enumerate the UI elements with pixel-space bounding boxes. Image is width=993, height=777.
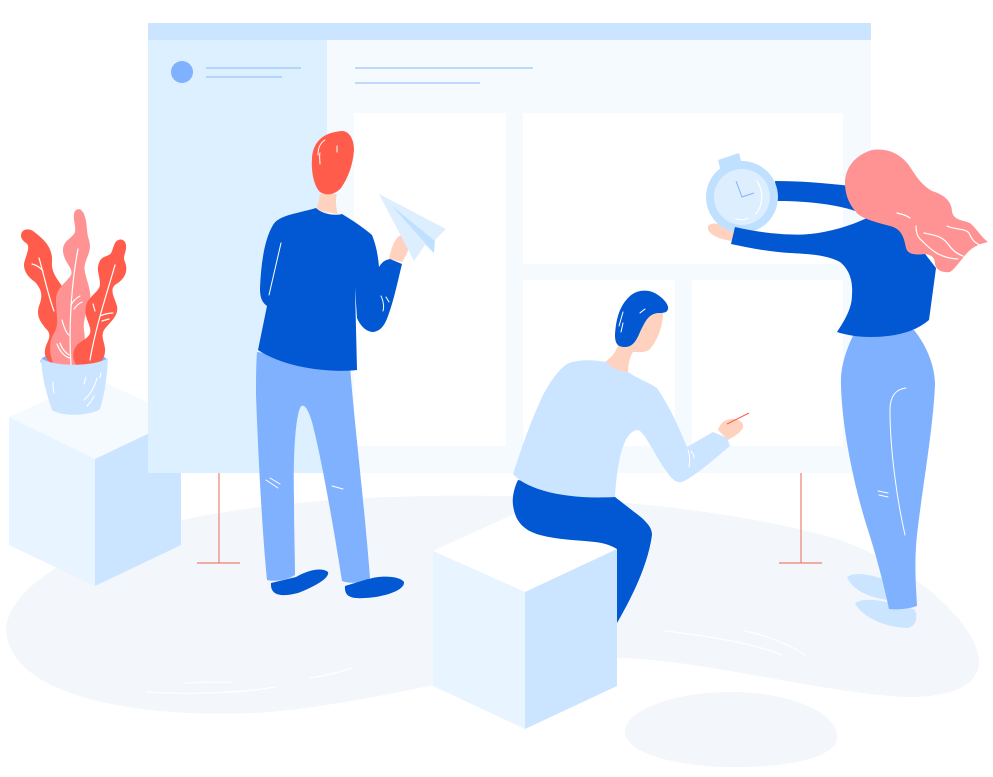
leaf veins (32, 249, 115, 365)
paper plane (379, 194, 446, 261)
stopwatch highlights (736, 181, 762, 220)
man standing (256, 131, 446, 598)
woman hair (845, 150, 988, 272)
center box (433, 509, 617, 729)
seated man sweater (513, 360, 730, 497)
woman back arm (775, 181, 858, 212)
pot (41, 358, 108, 415)
plant (21, 209, 126, 415)
stopwatch (706, 153, 778, 233)
man hair (312, 131, 354, 194)
seated hair highlights (619, 309, 645, 332)
seated man hair (615, 291, 668, 347)
middle leaf (50, 209, 90, 365)
card tall left (354, 113, 506, 446)
board (148, 23, 871, 473)
man neck (316, 194, 338, 214)
card bottom right (692, 280, 843, 446)
floor highlights (147, 631, 805, 693)
avatar dot (171, 61, 193, 83)
man left shoe (271, 570, 328, 595)
man hand (389, 235, 410, 262)
woman (706, 150, 988, 628)
hair strands (897, 213, 980, 259)
stopwatch hands (736, 181, 754, 197)
card bottom middle (523, 280, 675, 446)
sidebar lines (206, 68, 301, 77)
woman sweater (731, 218, 936, 337)
man pants (256, 352, 370, 583)
stopwatch crown (718, 153, 742, 172)
right leaf (73, 239, 126, 365)
pen (727, 413, 749, 424)
floor blob (6, 496, 979, 714)
man right shoe (345, 577, 404, 598)
seated man pants (513, 480, 652, 623)
hair highlights (318, 140, 337, 164)
pot highlights (53, 373, 101, 406)
seated man neck and face (604, 310, 663, 374)
leg highlights (878, 388, 906, 535)
soil (40, 352, 108, 370)
board stand legs (197, 473, 822, 563)
woman back foot (847, 574, 888, 600)
header lines (355, 68, 533, 83)
seated sweater highlights (688, 450, 694, 467)
card wide top (523, 113, 843, 264)
seated man hand (718, 419, 743, 440)
woman legs (841, 330, 935, 609)
woman front foot (855, 600, 916, 628)
seated man (513, 291, 749, 623)
board top bar (148, 23, 871, 40)
woman hand (708, 224, 740, 241)
man sweater (258, 208, 402, 371)
sweater highlights (269, 243, 389, 311)
left leaf (21, 229, 62, 366)
stopwatch body (706, 161, 778, 233)
board sidebar (148, 40, 327, 473)
pants creases (266, 478, 343, 489)
left box (9, 378, 181, 586)
stopwatch face (714, 169, 770, 225)
floor shadow ellipse (625, 692, 837, 767)
